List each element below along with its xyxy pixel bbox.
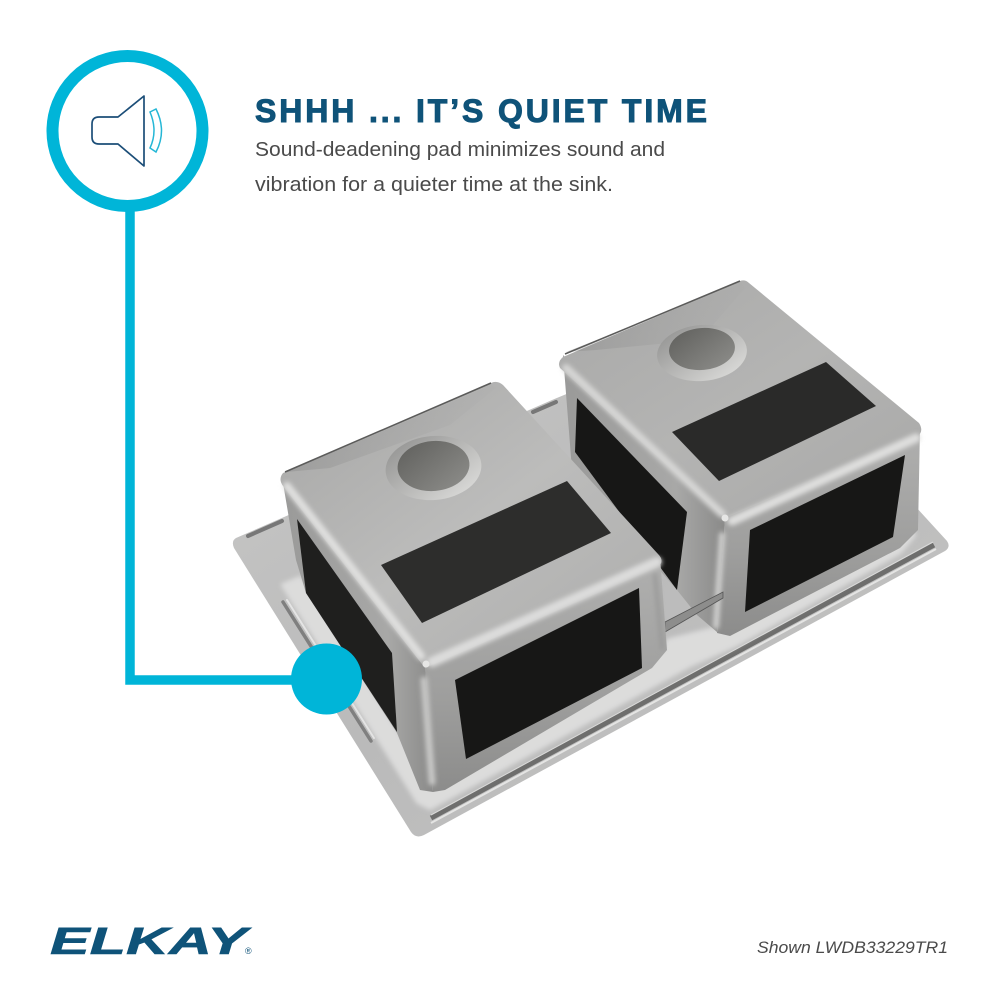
- back and left flange rails: [248, 402, 556, 741]
- logo: Elkay: [50, 921, 253, 963]
- right bowl drain: [655, 321, 749, 385]
- front flange rails: [431, 542, 936, 823]
- left bowl sides: [282, 477, 433, 792]
- right bowl sound pads: [575, 362, 905, 612]
- logo: Elkay: ®: [245, 946, 252, 956]
- heading: SHHH ... IT’S QUIET TIME: [255, 93, 707, 129]
- logo: Elkay: ELKAY: [50, 921, 253, 963]
- left bowl drain: [383, 432, 484, 504]
- body text: vibration for a quieter time at the sink.: [255, 173, 613, 196]
- right bowl top face: [559, 280, 921, 518]
- right bowl: [559, 280, 921, 636]
- brace strip between bowls: [665, 592, 723, 632]
- right bowl bevel highlights: [566, 368, 916, 626]
- left bowl top face: [280, 382, 662, 668]
- callout dot: [291, 644, 362, 714]
- left bowl bevel highlights: [287, 486, 662, 782]
- raised basin skirts: [283, 520, 914, 808]
- body text: Sound-deadening pad minimizes sound and: [255, 138, 665, 161]
- model caption: Shown LWDB33229TR1: [757, 938, 948, 957]
- icon: speaker in circle: [52, 56, 202, 206]
- body text: [255, 138, 665, 196]
- left bowl: [280, 382, 667, 792]
- sink flange: [233, 320, 949, 836]
- right bowl sides: [563, 355, 725, 632]
- sink illustration: [233, 280, 949, 836]
- left bowl sound pads: [297, 481, 642, 759]
- callout ring connector line: [130, 205, 300, 680]
